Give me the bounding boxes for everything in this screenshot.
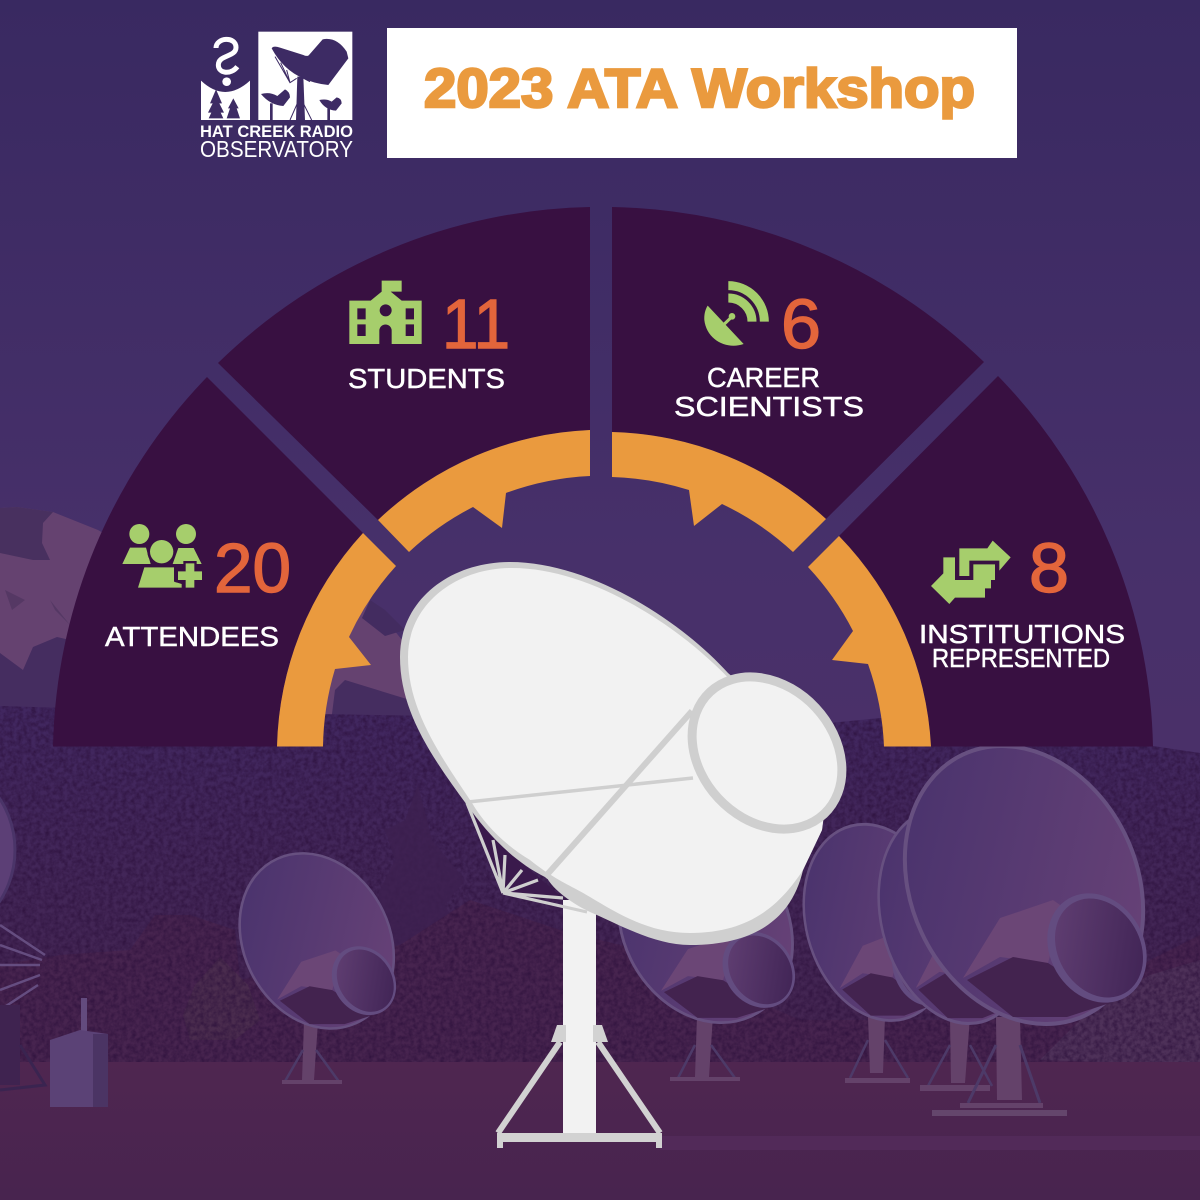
label: students: STUDENTS	[348, 363, 505, 394]
logo text line one: HAT CREEK RADIO	[200, 122, 353, 141]
dark backing inside truss	[470, 810, 563, 898]
tall pine tree	[370, 785, 470, 950]
grass field	[0, 1062, 1200, 1200]
dish truss	[467, 803, 587, 912]
background dish right middle	[850, 779, 1059, 1054]
panel background	[612, 207, 984, 519]
background dish left	[211, 829, 422, 1053]
icon: satellite dish with signal	[704, 286, 764, 346]
panel: institutions represented	[839, 376, 1153, 746]
dish outer outline	[400, 562, 830, 945]
title text: 2023 ATA Workshop	[424, 57, 975, 119]
telescope pole	[563, 900, 596, 1133]
snow-covered mountain	[0, 507, 420, 730]
number: 8: 8	[1029, 529, 1069, 607]
far-left dish	[0, 758, 45, 1090]
number: 20: 20	[214, 529, 291, 607]
icon: exchange arrows	[931, 541, 1011, 604]
small green tree	[183, 957, 260, 1040]
ring segment left	[277, 533, 396, 746]
label: career: CAREER	[707, 362, 820, 393]
panel: students	[218, 207, 590, 520]
dish struts	[468, 778, 693, 802]
orange gauge ring	[277, 430, 931, 746]
logo: Hat Creek Radio Observatory	[200, 32, 353, 162]
label: scientists: SCIENTISTS	[674, 391, 864, 422]
ring segment right	[808, 536, 931, 746]
number: 6: 6	[781, 285, 821, 363]
forested hillside	[0, 706, 1200, 1070]
dish white fill	[408, 568, 830, 933]
feed horn	[661, 647, 873, 859]
title banner	[387, 28, 1017, 158]
icon: school building	[349, 281, 422, 344]
background dish right front	[861, 707, 1187, 1063]
panel background	[218, 207, 590, 520]
ring segment top left	[378, 430, 590, 552]
panel: career scientists	[612, 207, 984, 519]
label: represented: REPRESENTED	[932, 643, 1110, 673]
label: attendees: ATTENDEES	[105, 621, 279, 652]
background dish right rear	[776, 797, 979, 1048]
background dish behind the main dish	[586, 802, 825, 1050]
logo text line two: OBSERVATORY	[200, 136, 353, 162]
telescope base	[497, 1025, 662, 1148]
number: 11: 11	[442, 285, 510, 363]
ring segment top right	[612, 432, 826, 552]
main white radio telescope	[400, 562, 873, 1148]
panel background	[53, 377, 363, 746]
dish stands	[282, 1015, 1067, 1116]
logo mark	[201, 32, 352, 120]
shed	[50, 998, 108, 1107]
pale shrubs on the right	[1040, 960, 1200, 1065]
icon: people with plus	[122, 524, 202, 588]
bushes and shrubs	[0, 900, 1200, 1065]
panel background	[839, 376, 1153, 746]
label: institutions: INSTITUTIONS	[919, 619, 1125, 649]
panel: attendees	[53, 377, 363, 746]
